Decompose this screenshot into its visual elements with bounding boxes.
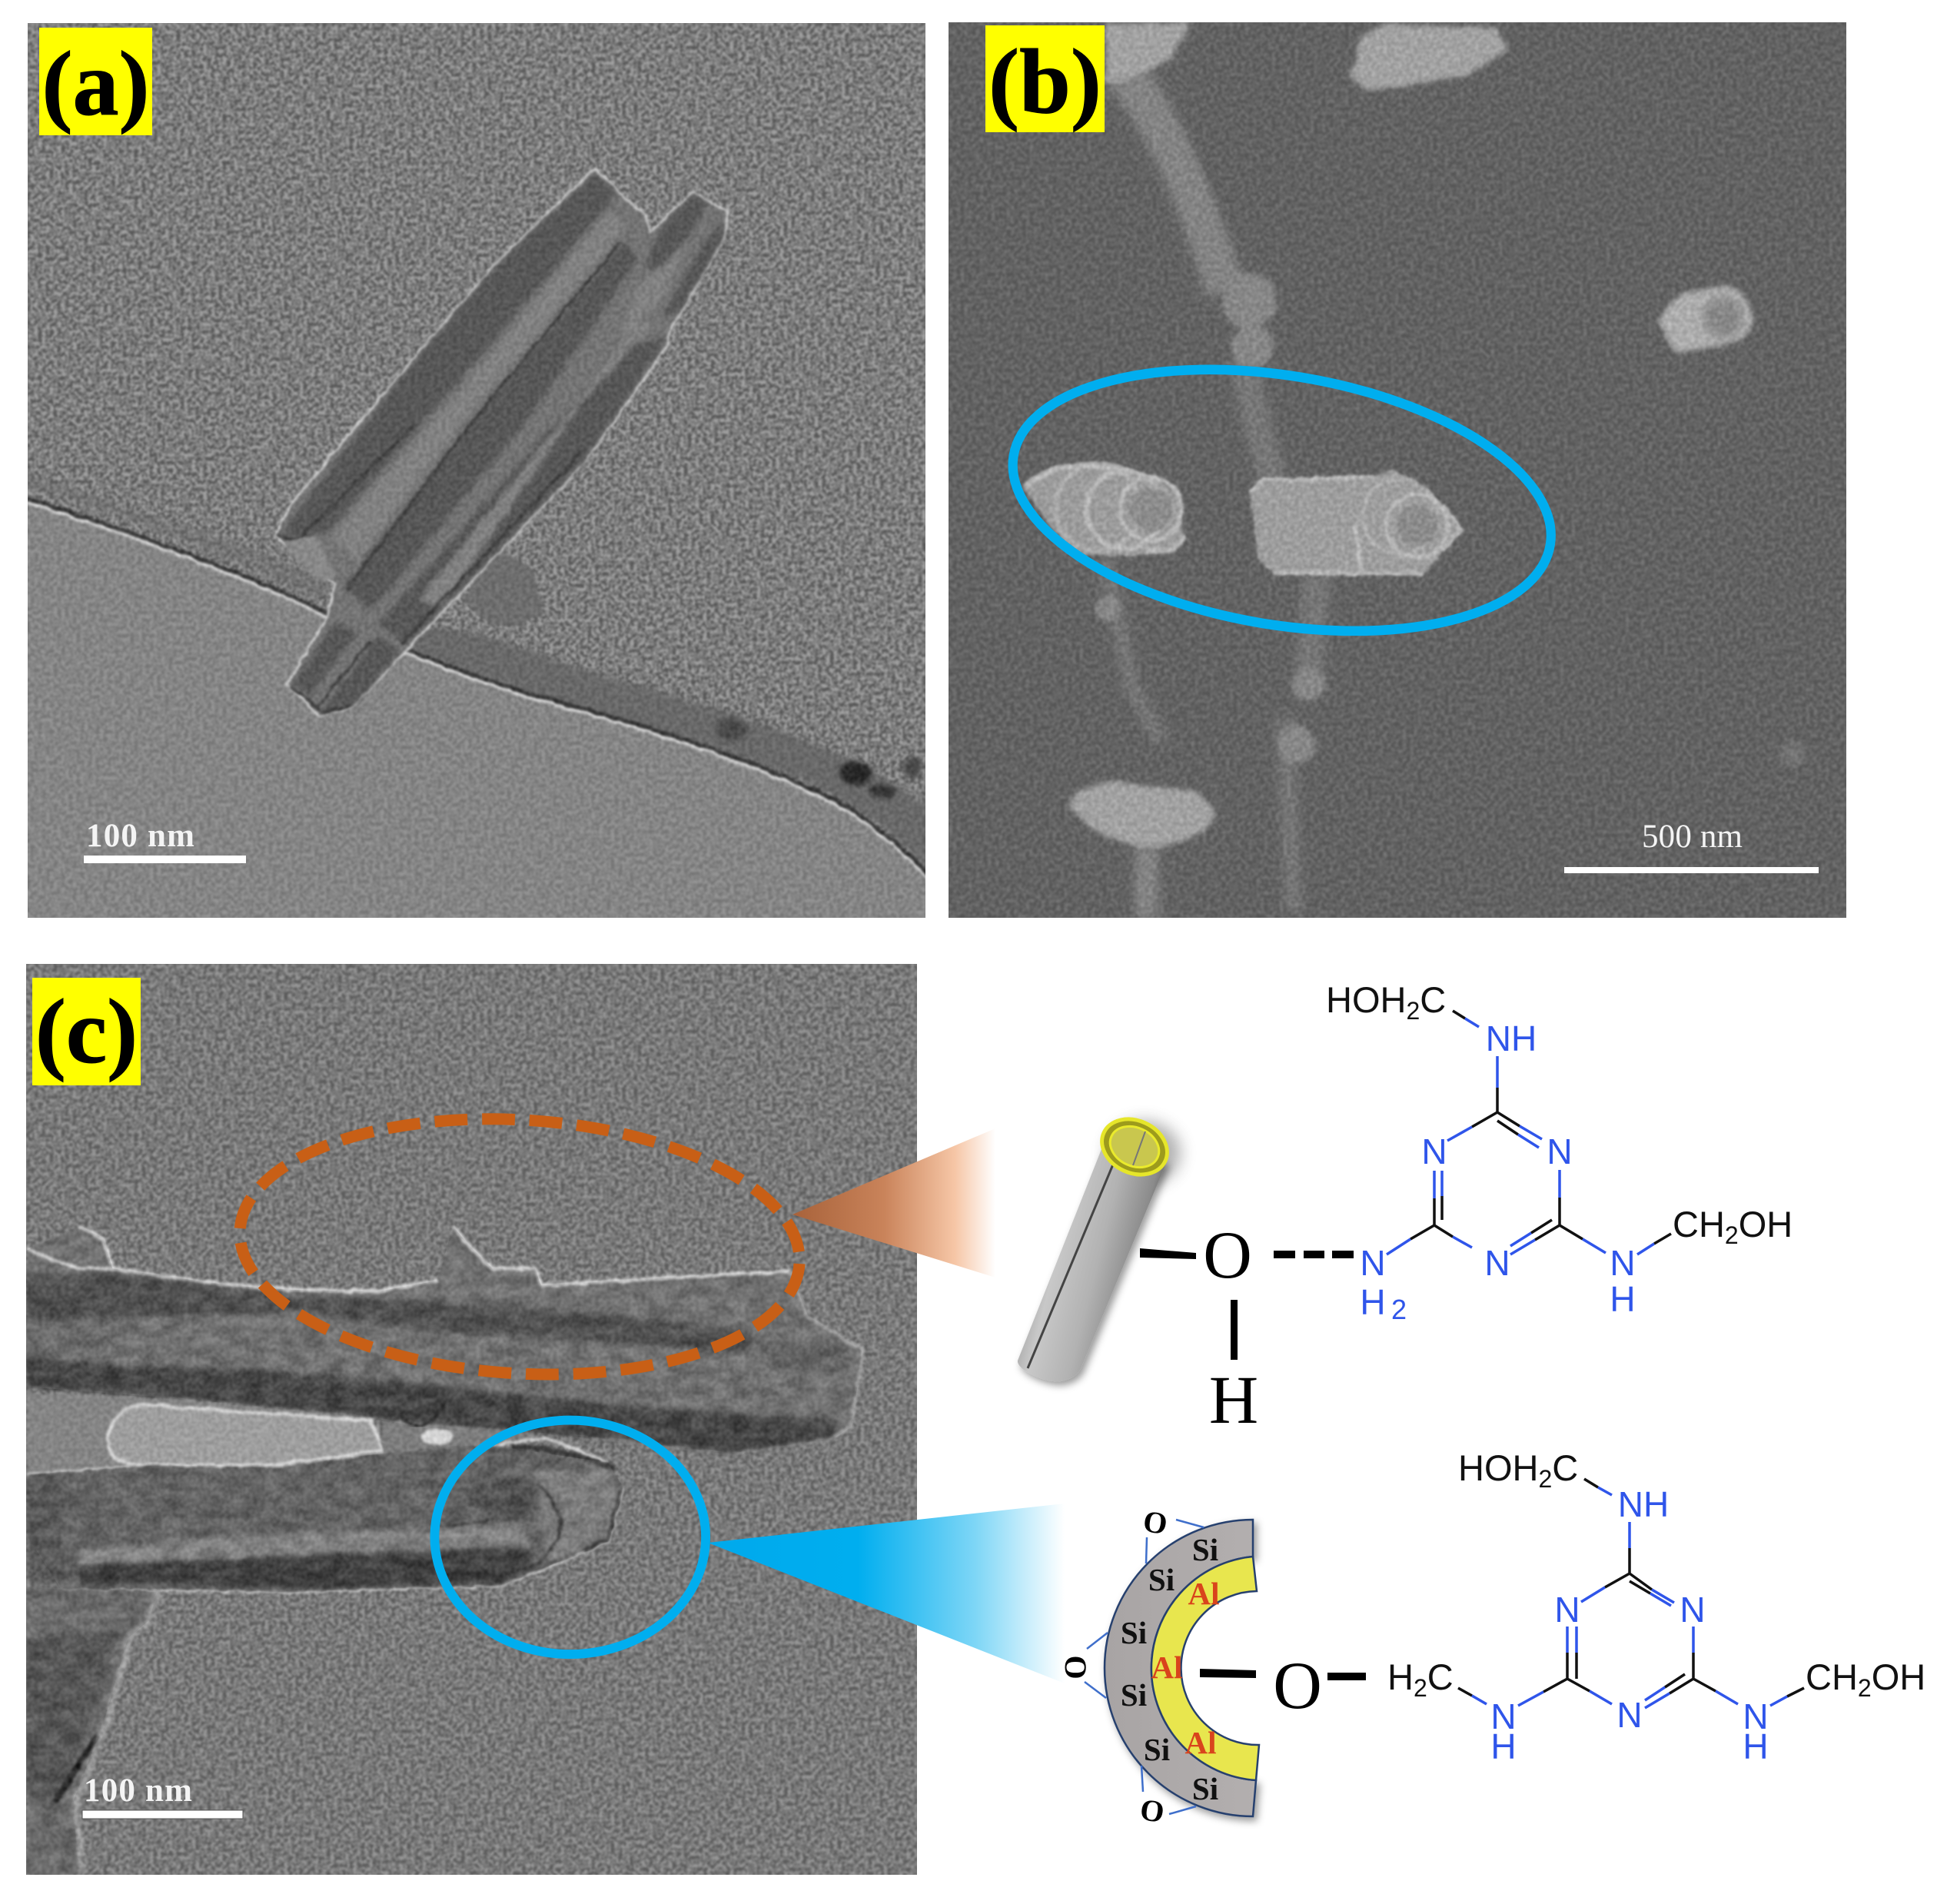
- icon: nanotube cross-section (Si/Al layers): Si: [1192, 1771, 1218, 1806]
- molecule: upper methylol melamine: C: [1420, 979, 1446, 1020]
- nanotube bundle body: [277, 170, 726, 714]
- icon: nanotube cross-section (Si/Al layers): O: [1141, 1504, 1170, 1541]
- molecule: upper methylol melamine: H: [1360, 1282, 1386, 1322]
- support film band: [407, 626, 930, 873]
- tube base flake: [286, 535, 337, 580]
- upper tube dark bands: [27, 1274, 845, 1454]
- molecule bonding: upper hydrogen bond: [1140, 1218, 1354, 1438]
- molecule bonding: upper hydrogen bond: H: [1209, 1363, 1258, 1438]
- molecule: lower melamine derivative: H: [1387, 1656, 1414, 1697]
- molecule: upper methylol melamine: N: [1484, 1243, 1510, 1283]
- round end of isolated tube: [1703, 297, 1743, 338]
- scale bar (b) 500 nm: 500 nm: [1642, 819, 1743, 855]
- dark debris at film edge: [718, 719, 922, 799]
- right tube with end rings: [1250, 469, 1461, 574]
- molecule: lower melamine derivative: C: [1427, 1656, 1454, 1697]
- molecule: lower melamine derivative: C: [1552, 1447, 1578, 1488]
- lower nanotube halo: [27, 1438, 623, 1591]
- molecule: lower melamine derivative: NH: [1618, 1484, 1669, 1524]
- molecule: lower melamine derivative: 2: [1858, 1674, 1872, 1702]
- molecule: upper methylol melamine: 2: [1391, 1294, 1407, 1325]
- molecule: lower melamine derivative: N: [1680, 1590, 1706, 1630]
- lower vacuum region of grid: [28, 498, 930, 924]
- nanotube blobs: [1070, 23, 1756, 849]
- molecule: upper methylol melamine: 2: [1406, 997, 1420, 1025]
- icon: nanotube cross-section (Si/Al layers): Al: [1185, 1725, 1216, 1760]
- scale bar (a) 100 nm: 100 nm: [86, 818, 194, 854]
- molecule: upper methylol melamine: N: [1610, 1243, 1636, 1283]
- light inner gap: [27, 1393, 383, 1475]
- left tube cross-section: [1023, 462, 1184, 557]
- molecule: lower melamine derivative: H: [1743, 1726, 1769, 1766]
- molecule: upper methylol melamine: HOH: [1326, 979, 1406, 1020]
- molecule: upper methylol melamine: N: [1421, 1131, 1447, 1171]
- ridge shadow: [1141, 85, 1229, 267]
- molecule: lower melamine derivative: N: [1616, 1695, 1643, 1735]
- film shoulder left of tube: [28, 474, 341, 602]
- curled inner sheet: [450, 1447, 620, 1575]
- fine grain overlay panel a: [28, 23, 925, 918]
- lower nanotube body: [27, 1444, 623, 1591]
- icon: nanotube cross-section (Si/Al layers): Si: [1121, 1677, 1147, 1713]
- upper nanotube body: [27, 1226, 863, 1454]
- label (c): (c): [35, 980, 138, 1082]
- upper tube right edge: [608, 1271, 863, 1454]
- molecule: lower melamine derivative: 2: [1538, 1465, 1552, 1493]
- icon: nanotube cross-section (Si/Al layers): Si: [1144, 1732, 1170, 1767]
- icon: nanotube cross-section (Si/Al layers): [1058, 1504, 1259, 1829]
- scale bar (b) 500 nm: [1564, 819, 1819, 873]
- molecule: lower melamine derivative: 2: [1414, 1674, 1427, 1702]
- scale bar (c) 100 nm: [82, 1773, 243, 1819]
- lower tube light band and curled end: [79, 1469, 620, 1566]
- label (a): (a): [42, 32, 149, 135]
- bottom left debris: [27, 1587, 158, 1875]
- molecule: upper methylol melamine: NH: [1486, 1018, 1537, 1058]
- icon: nanotube cross-section (Si/Al layers): Si: [1121, 1615, 1147, 1650]
- label (b): (b): [988, 30, 1101, 132]
- scale bar (c) 100 nm: 100 nm: [84, 1773, 192, 1809]
- molecule: upper methylol melamine: N: [1547, 1131, 1573, 1171]
- molecule: lower melamine derivative: N: [1490, 1696, 1517, 1736]
- molecule bonding: upper hydrogen bond: O: [1203, 1218, 1252, 1293]
- thin dark lumen lines: [277, 243, 620, 713]
- molecule: lower melamine derivative: CH: [1806, 1656, 1858, 1697]
- ridge lower part: [1244, 359, 1273, 480]
- orange dashed ellipse: [232, 1103, 807, 1391]
- molecule: upper methylol melamine: H: [1610, 1279, 1636, 1319]
- flake beside tube: [462, 547, 542, 626]
- molecule: lower melamine derivative: OH: [1872, 1656, 1925, 1697]
- noise texture panel b: [949, 22, 1846, 918]
- molecule: upper methylol melamine: 2: [1725, 1221, 1739, 1249]
- substrate ridge: [1120, 67, 1226, 292]
- icon: nanotube cross-section (Si/Al layers): Al: [1151, 1650, 1182, 1685]
- background grain panel a: [28, 23, 925, 918]
- blue ellipse highlight (b): [995, 334, 1569, 667]
- molecule: upper methylol melamine: [1326, 979, 1793, 1325]
- panel: (c) TEM micrograph: [26, 964, 917, 1881]
- icon: nanotube cross-section (Si/Al layers): O: [1138, 1792, 1167, 1829]
- gap junction and crescent: [383, 1421, 535, 1454]
- nanotube halo: [277, 170, 726, 714]
- arrow: blue zoom cone: [708, 1504, 1065, 1683]
- molecule bonding: lower covalent link: O: [1273, 1649, 1322, 1723]
- curled dark core: [471, 1477, 538, 1520]
- molecule: lower melamine derivative: N: [1554, 1590, 1580, 1630]
- molecule: upper methylol melamine: N: [1360, 1243, 1386, 1283]
- icon: nanotube cross-section (Si/Al layers): O: [1058, 1655, 1093, 1680]
- light inner lumen: [333, 210, 687, 608]
- arrow: orange zoom cone: [792, 1128, 995, 1278]
- blue ellipse: [434, 1421, 706, 1654]
- strand beads: [1095, 594, 1806, 767]
- molecule bonding: lower covalent link: [1200, 1649, 1366, 1723]
- upper tube white edge: [27, 1226, 790, 1291]
- noise texture panel c: [26, 964, 917, 1877]
- molecule: upper methylol melamine: OH: [1739, 1204, 1793, 1244]
- icon: rolled nanotube: [1018, 1109, 1181, 1381]
- icon: nanotube cross-section (Si/Al layers): Si: [1192, 1532, 1218, 1567]
- molecule: lower melamine derivative: H: [1490, 1726, 1517, 1766]
- ridge bead: [1222, 273, 1277, 368]
- icon: nanotube cross-section (Si/Al layers): Al: [1188, 1576, 1219, 1611]
- molecule: upper methylol melamine: CH: [1673, 1204, 1725, 1244]
- panel: (a) TEM micrograph: [28, 23, 930, 924]
- panel: (b) SEM micrograph: [949, 22, 1846, 918]
- molecule: lower melamine derivative: [1387, 1447, 1925, 1766]
- tube mottling texture: [27, 1220, 878, 1881]
- dark wall stripes: [280, 173, 725, 714]
- molecule: lower melamine derivative: HOH: [1458, 1447, 1538, 1488]
- icon: nanotube cross-section (Si/Al layers): Si: [1148, 1562, 1175, 1597]
- molecule: lower melamine derivative: N: [1743, 1696, 1769, 1736]
- lower strands: [1105, 560, 1317, 918]
- background grain panel c: [26, 964, 917, 1877]
- scale bar (a) 100 nm: [84, 818, 246, 863]
- lower tube dark band: [79, 1549, 532, 1589]
